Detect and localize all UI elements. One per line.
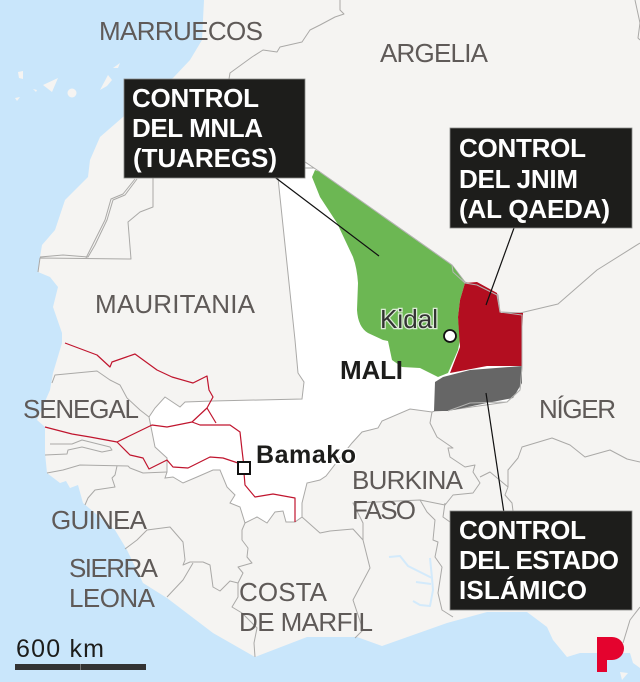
label: Costa de Marfil: COSTA: [239, 577, 328, 607]
label: Argelia: ARGELIA: [380, 38, 489, 68]
callout: MNLA: [124, 79, 305, 178]
scale bar: [15, 635, 146, 670]
area: MNLA control: [312, 170, 465, 377]
marker: Bamako: [238, 462, 250, 474]
area: JNIM control: [450, 282, 523, 373]
callout: Estado Islámico: [450, 511, 632, 610]
label: Mali: MALI: [340, 355, 403, 385]
callout: MNLA: (TUAREGS): [133, 143, 277, 173]
label: Níger: NÍGER: [539, 394, 616, 424]
leader line: JNIM: [486, 228, 514, 305]
label: Mauritania: MAURITANIA: [95, 289, 256, 319]
label: Sierra Leona: SIERRA: [69, 553, 159, 583]
callout: JNIM: DEL JNIM: [459, 164, 578, 194]
railway network: [45, 343, 295, 522]
callout: Estado Islámico: DEL ESTADO: [459, 545, 619, 575]
callout: MNLA: DEL MNLA: [132, 113, 263, 143]
callout: MNLA: CONTROL: [132, 83, 259, 113]
label: Sierra Leona: [69, 553, 159, 613]
area: Estado Islámico control: [434, 366, 522, 411]
label: Costa de Marfil: [239, 577, 373, 637]
callout: JNIM: [450, 128, 632, 228]
label: Guinea: GUINEA: [51, 505, 148, 535]
label: Costa de Marfil: DE MARFIL: [239, 607, 373, 637]
callout: Estado Islámico: CONTROL: [459, 515, 586, 545]
label: Burkina Faso: FASO: [352, 495, 416, 525]
label: Sierra Leona: LEONA: [69, 583, 156, 613]
callout: JNIM: CONTROL: [459, 133, 586, 163]
island: gulf of guinea: [620, 672, 628, 680]
panel: Mali territory: [149, 162, 522, 523]
leader line: MNLA: [268, 172, 379, 256]
label: Senegal: SENEGAL: [23, 394, 139, 424]
label: Bamako: Bamako: [256, 441, 356, 469]
label: Kidal: Kidal: [380, 304, 438, 334]
callout: JNIM: (AL QAEDA): [459, 194, 610, 224]
label: Burkina Faso: [352, 465, 464, 525]
leader line: Estado Islámico: [486, 393, 504, 513]
border overlay on controlled areas: [320, 172, 522, 411]
label: Burkina Faso: BURKINA: [352, 465, 464, 495]
marker: Kidal: [444, 330, 456, 342]
scale bar: 600 km: [16, 635, 104, 663]
canary islands: [15, 63, 120, 101]
label: Marruecos: MARRUECOS: [99, 16, 263, 46]
callout: Estado Islámico: ISLÁMICO: [459, 575, 587, 605]
logo: [597, 637, 624, 672]
lake volta: [389, 556, 433, 606]
